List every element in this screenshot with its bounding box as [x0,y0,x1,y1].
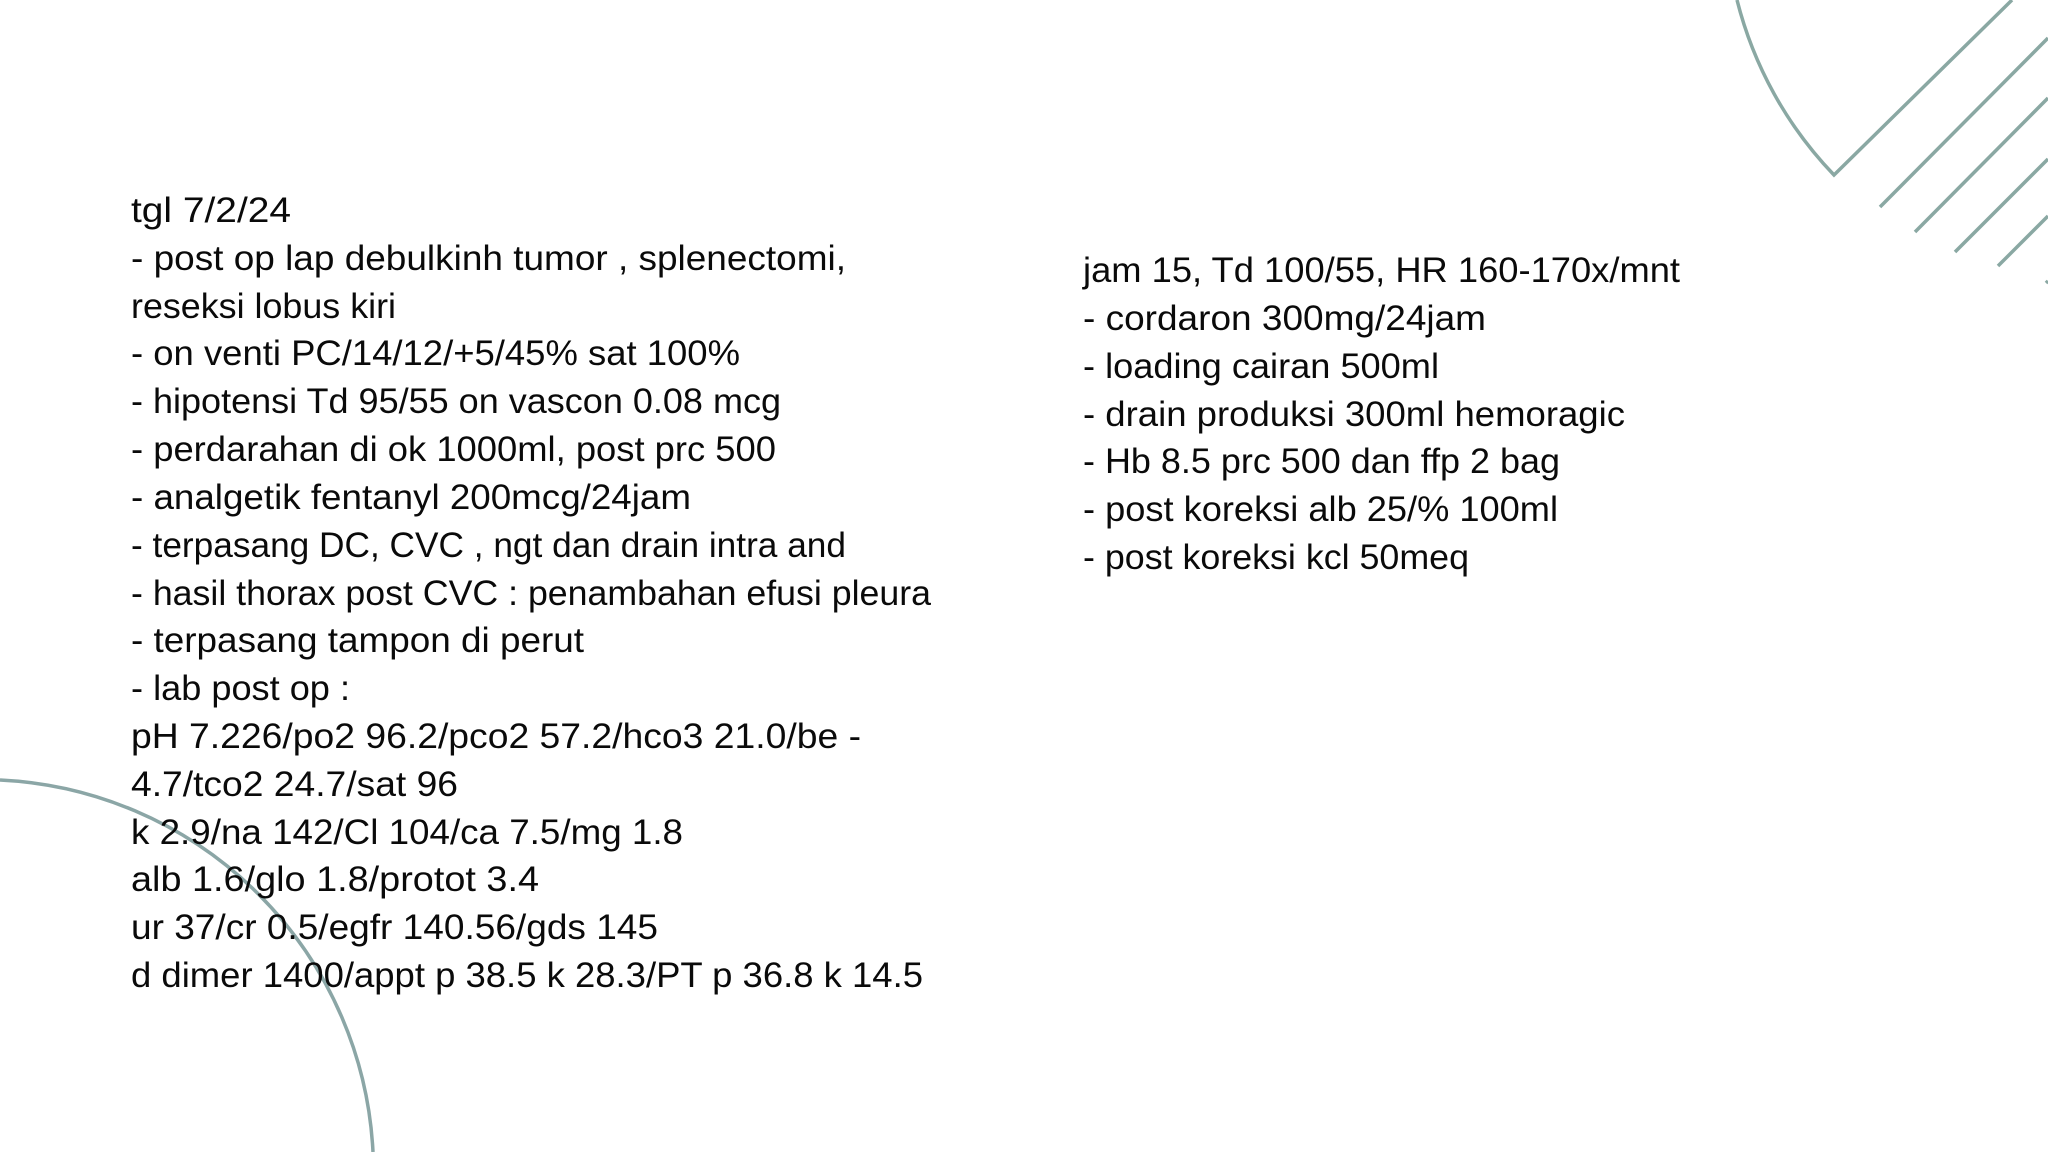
text block: left column clinical notes: tgl 7/2/24 [131,191,291,230]
text block: left column clinical notes [131,191,932,995]
text block: right column clinical notes: - post koreksi kcl 50meq [1083,538,1469,577]
text block: left column clinical notes: - analgetik fentanyl 200mcg/24jam [131,478,691,517]
text block: left column clinical notes: - terpasang tampon di perut [131,621,584,660]
decoration: bottom left arc [0,780,373,1152]
text block: left column clinical notes: - on venti PC/14/12/+5/45% sat 100% [131,334,740,373]
text block: left column clinical notes: 4.7/tco2 24.7/sat 96 [131,765,458,804]
text block: right column clinical notes: - post koreksi alb 25/% 100ml [1083,490,1558,529]
text block: left column clinical notes: ur 37/cr 0.5/egfr 140.56/gds 145 [131,908,658,947]
text block: left column clinical notes: - perdarahan di ok 1000ml, post prc 500 [131,430,776,469]
text block: right column clinical notes [1082,251,1680,577]
text block: left column clinical notes: alb 1.6/glo 1.8/protot 3.4 [131,860,539,899]
text block: left column clinical notes: - lab post op : [131,669,350,708]
text block: left column clinical notes: pH 7.226/po2 96.2/pco2 57.2/hco3 21.0/be - [131,717,861,756]
text block: left column clinical notes: - hipotensi Td 95/55 on vascon 0.08 mcg [131,382,781,421]
text block: left column clinical notes: k 2.9/na 142/Cl 104/ca 7.5/mg 1.8 [131,813,683,852]
text block: right column clinical notes: - drain produksi 300ml hemoragic [1083,395,1625,434]
text block: right column clinical notes: - loading cairan 500ml [1083,347,1439,386]
decoration: top right arc with diagonal lines [1737,0,2048,283]
text block: right column clinical notes: - Hb 8.5 prc 500 dan ffp 2 bag [1083,442,1560,481]
text block: left column clinical notes: - hasil thorax post CVC : penambahan efusi pleura [131,574,932,613]
text block: left column clinical notes: - terpasang DC, CVC , ngt dan drain intra and [131,526,846,565]
text block: right column clinical notes: jam 15, Td 100/55, HR 160-170x/mnt [1082,251,1680,290]
text block: left column clinical notes: d dimer 1400/appt p 38.5 k 28.3/PT p 36.8 k 14.5 [131,956,923,995]
text block: left column clinical notes: reseksi lobus kiri [131,287,396,326]
text block: left column clinical notes: - post op lap debulkinh tumor , splenectomi, [131,239,846,278]
text block: right column clinical notes: - cordaron 300mg/24jam [1083,299,1486,338]
